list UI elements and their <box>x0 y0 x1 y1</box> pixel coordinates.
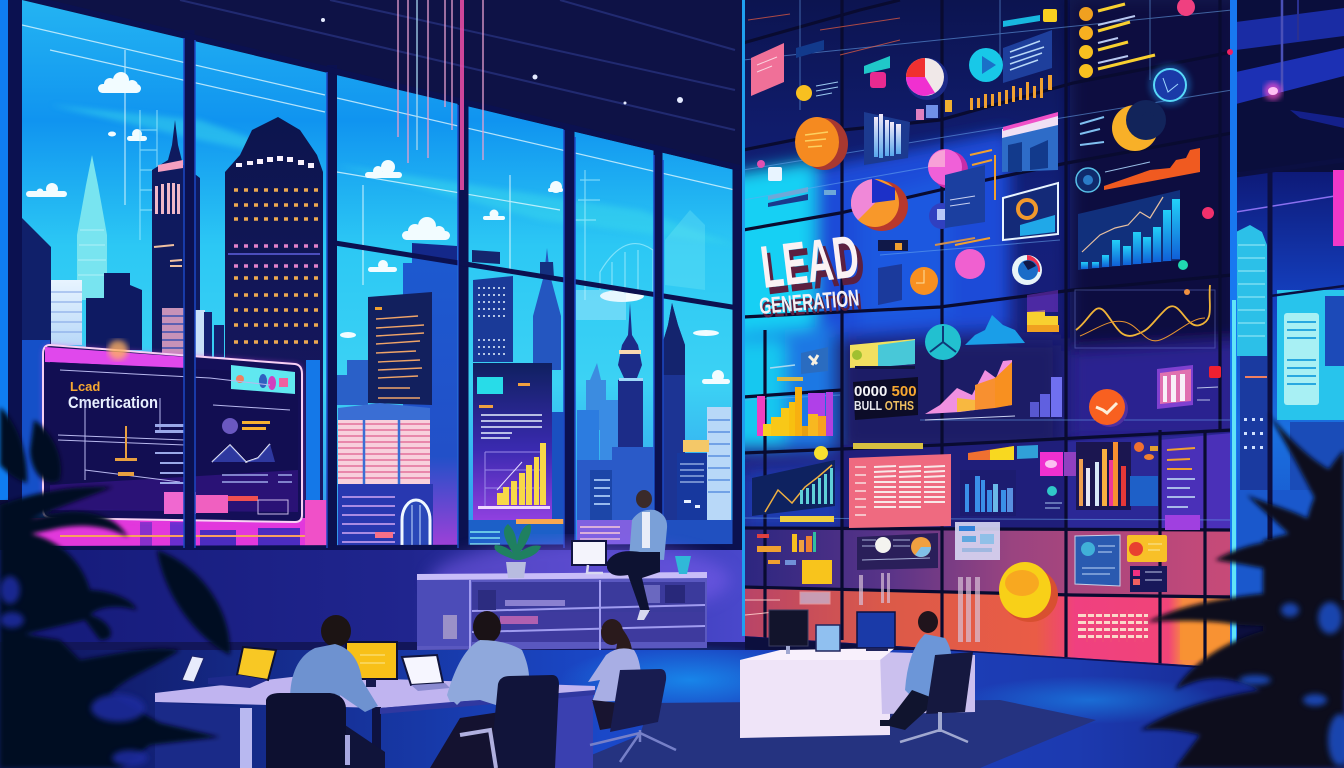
shelf <box>417 572 707 650</box>
foreground plant left <box>0 407 230 768</box>
purple bars <box>1030 377 1062 417</box>
chair left <box>266 693 350 768</box>
wall socket <box>443 615 457 639</box>
chair right <box>590 669 676 762</box>
round icon <box>1076 168 1100 192</box>
mini widgets right column <box>1130 442 1200 530</box>
chair center <box>460 675 559 768</box>
yellow line chart <box>1075 285 1215 348</box>
sky <box>22 0 736 548</box>
blue bars chart <box>1078 190 1180 270</box>
office table <box>155 676 595 768</box>
blue bars panel <box>960 470 1016 516</box>
pane 4 towers <box>473 276 513 362</box>
potted plant <box>494 524 541 578</box>
red magenta badge <box>1177 0 1195 16</box>
blue gaps in leaves <box>0 576 148 766</box>
moon ring <box>1080 100 1166 151</box>
holographic panel: lead generation <box>43 340 302 522</box>
pink bars card <box>1157 365 1193 409</box>
vertical pillars <box>859 573 980 642</box>
bar chart: white blue <box>864 112 910 165</box>
3D orange circle <box>795 117 848 170</box>
small card <box>796 40 824 58</box>
yellow bar chart <box>757 387 833 436</box>
ring chart <box>1012 255 1042 285</box>
small teal icon <box>1045 486 1062 508</box>
right windows <box>1236 0 1344 600</box>
line chart panel <box>752 446 835 522</box>
tablet <box>182 656 204 682</box>
pink orange area chart <box>925 360 1015 420</box>
orange area chart <box>1104 148 1200 190</box>
blue card <box>1075 535 1120 586</box>
yellow banner <box>850 339 915 369</box>
title: LEAD GENERATION: GENERATION <box>758 284 860 319</box>
pink and teal dots <box>1178 207 1214 270</box>
central pink strand <box>460 0 464 190</box>
magenta square <box>1040 452 1076 476</box>
colored bar chart <box>1076 442 1131 510</box>
pie chart: red white magenta <box>906 58 948 100</box>
rug <box>560 700 1096 768</box>
title: LEAD GENERATION: LEAD <box>761 229 868 307</box>
man at table left <box>290 615 385 768</box>
yellow circle <box>999 562 1058 622</box>
holographic panel: lead generation: Cmertication <box>68 393 158 412</box>
panel pink buttons <box>164 492 288 514</box>
icon widget left <box>757 160 836 207</box>
number plate: BULL OTHS <box>854 398 914 413</box>
blue gaps in leaves right <box>1239 602 1344 766</box>
foreground plant right <box>1140 412 1344 768</box>
pink table card <box>849 454 951 528</box>
orange dial <box>910 267 938 295</box>
check circle <box>1089 389 1128 427</box>
title: LEAD GENERATION: LEAD <box>757 222 862 301</box>
data wall <box>725 0 1240 668</box>
seated man <box>880 611 952 730</box>
colored strip <box>968 445 1038 460</box>
orange-lined stripes <box>745 592 830 615</box>
faint hologram structures <box>140 110 653 300</box>
red square <box>1197 366 1221 400</box>
widgets near title <box>878 238 975 305</box>
man sitting on shelf <box>607 490 667 620</box>
teal and magenta widgets <box>864 56 890 88</box>
man at table center <box>430 611 529 768</box>
yellow card <box>1127 535 1167 562</box>
small white monitor <box>572 541 606 573</box>
panel line chart <box>212 418 292 482</box>
pink striped building <box>338 403 433 548</box>
woman at table <box>588 619 641 730</box>
panel heading: Lcad <box>70 379 100 394</box>
top cyan bar and badge <box>1003 9 1057 27</box>
yellow laptop <box>208 647 276 688</box>
bottom small bars <box>757 532 816 565</box>
monitors <box>769 610 895 654</box>
title: LEAD GENERATION <box>757 222 868 323</box>
dark mini card <box>1130 566 1167 592</box>
cyan ornament <box>675 556 691 574</box>
video card <box>969 30 1052 83</box>
translucent card <box>955 522 1000 560</box>
orange donut card <box>1003 183 1058 240</box>
skyline chart <box>1002 112 1058 172</box>
yellow tag strip <box>853 443 923 449</box>
right skyline <box>1236 225 1267 356</box>
grid lines <box>743 0 1232 665</box>
pane 6 skyline <box>664 303 685 520</box>
laptops on table <box>182 642 450 691</box>
hanging pink light strands <box>398 0 483 163</box>
pane 5 skyline <box>586 380 606 430</box>
glowing blue ring <box>1149 64 1191 106</box>
teal pie <box>925 324 961 360</box>
window frame <box>15 0 740 552</box>
title: LEAD GENERATION: GENERATION <box>761 288 863 323</box>
wall colour regions <box>725 0 1240 530</box>
text card: pink <box>751 43 784 96</box>
yellow tabs <box>1027 290 1059 332</box>
yellow monitor <box>346 642 397 687</box>
slider card with pie <box>857 533 938 570</box>
building with chart <box>473 363 564 532</box>
pink haze bottom left <box>30 518 305 546</box>
number plate: 0000 500 <box>854 383 917 400</box>
left skyline <box>22 218 51 344</box>
clouds <box>26 72 730 384</box>
side card <box>945 165 990 245</box>
blue token <box>929 203 955 229</box>
list with yellow icons <box>1079 4 1155 78</box>
pink ball <box>928 149 968 189</box>
yellow badge <box>796 82 838 101</box>
orange bars strip <box>970 75 1052 110</box>
city windows <box>15 0 740 552</box>
floor <box>0 620 1344 768</box>
3D pie chart <box>851 178 908 231</box>
blue area chart <box>965 315 1025 345</box>
panel edge glow <box>742 0 1237 668</box>
yellow sticky <box>802 560 832 584</box>
white laptop <box>402 655 450 691</box>
pink disc <box>955 249 985 279</box>
number plate <box>853 377 918 420</box>
icon: small squares <box>916 100 952 120</box>
big tower with lights <box>225 117 323 548</box>
chair <box>900 652 973 742</box>
left edge glow <box>0 0 8 500</box>
desk and workstation at right <box>740 610 975 742</box>
panel cyan card <box>231 365 295 394</box>
middle skyline <box>403 243 457 548</box>
lower wall <box>0 542 745 670</box>
small blue card with icon <box>770 347 828 381</box>
sky streaks and faint lines <box>66 106 676 234</box>
orange strokes <box>970 150 995 200</box>
pink grid <box>1078 614 1148 638</box>
